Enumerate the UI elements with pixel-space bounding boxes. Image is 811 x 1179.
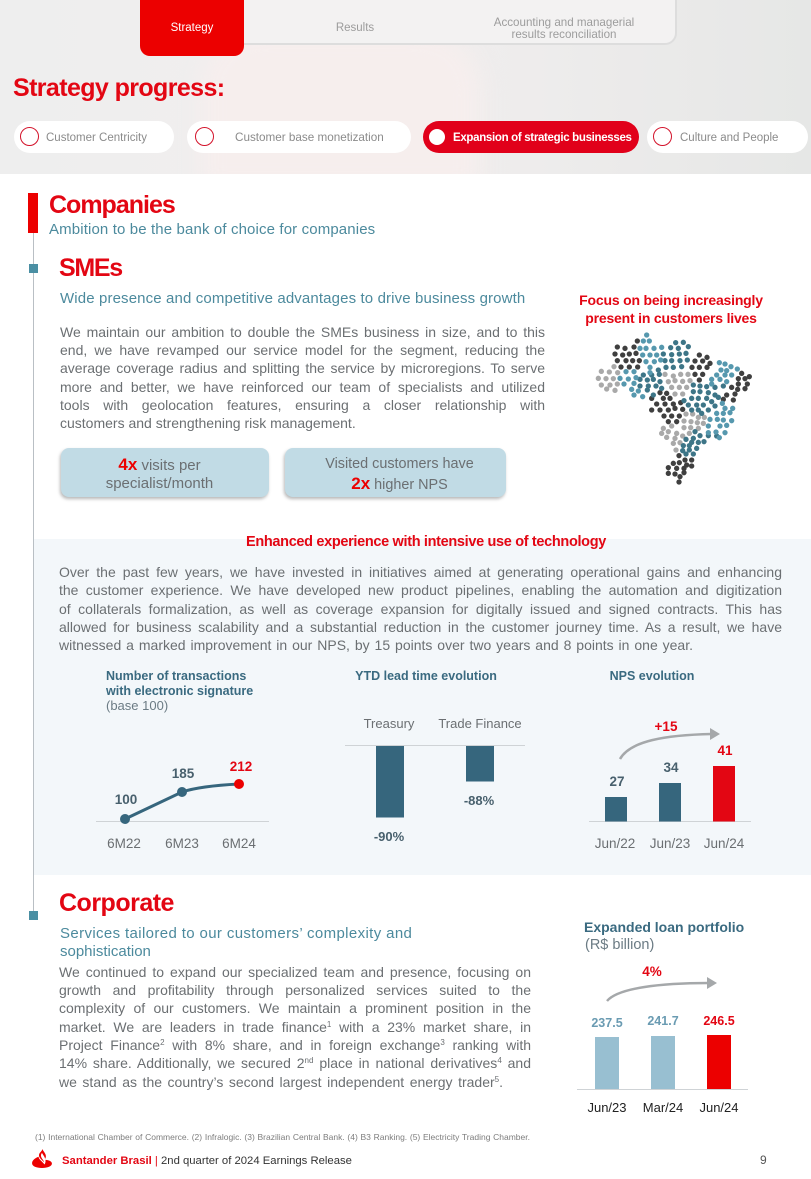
chart: expanded loan portfolio: (R$ billion) [585,937,654,953]
chart: NPS evolution: 34 [663,760,679,775]
active tab: Strategy [140,0,244,56]
pill: Culture and People [647,121,808,153]
text block: SMEs body: We maintain our ambition to double the SMEs business in size, and to this [60,324,545,340]
chart: electronic signature line: Number of transactions [106,669,246,683]
chart: NPS evolution: +15 [655,719,678,734]
chart: electronic signature line: with electronic signature [105,684,253,698]
text block: Corporate body: Project Finance2 with 8% share, and in foreign exchange3 ranking with [59,1037,531,1053]
chart: expanded loan portfolio: 237.5 [591,1016,623,1030]
chart: electronic signature line: (base 100) [106,698,168,713]
text block: technology body: witnessed a marked improvement in our NPS, by 15 points over two years and 8 points in one year. [59,637,693,653]
tab: Accounting and managerial results reconciliation: results reconciliation [511,28,617,41]
text block: SMEs body: tools with geolocation features, ensuring a closer relationship with [60,397,545,413]
footnote: (1) International Chamber of Commerce. (2) Infralogic. (3) Brazilian Central Bank. (4) B3 Ranking. (5) Electricity Trading Chamber. [35,1132,530,1142]
text block: Corporate body: 14% share. Additionally, we secured 2nd place in national derivatives4 and [59,1055,531,1071]
footer [32,1149,767,1168]
tab: Results: Results [336,22,374,34]
chart: YTD lead time: Trade Finance [438,716,522,731]
chart: expanded loan portfolio: 4% [642,964,662,979]
subheading: SMEs: Wide presence and competitive advantages to drive business growth [60,290,525,307]
chart: electronic signature line: 6M22 [107,836,141,851]
heading: Corporate: Corporate [59,889,174,917]
text block: technology body: of collaterals formalization, as well as coverage expansion for digitally issued and signed contracts. This has [59,601,782,617]
inactive tab bar [140,0,677,45]
subheading: Companies ambition: Ambition to be the bank of choice for companies [49,221,375,238]
chart: electronic signature line: 212 [230,759,252,774]
chart: NPS evolution: 27 [609,774,625,789]
text block: technology body: Over the past few years, we have invested in initiatives aimed at generating operational gains and enhancing [59,564,782,580]
subheading: Corporate: sophistication [60,943,151,960]
callout: 2x NPS [285,448,506,497]
chart: YTD lead time: -90% [374,829,405,844]
text block: Corporate body: We continued to expand our specialized team and presence, focusing on [59,964,531,980]
text block: SMEs body: average coverage radius and splitting the service by microregions. To serve [60,360,545,376]
heading: Companies: Companies [49,191,175,219]
tab: Accounting and managerial results reconciliation: Accounting and managerial [494,16,634,29]
text block: Corporate body: complexity of our customers. We maintain a prominent position in the [59,1000,531,1016]
chart: electronic signature line: 6M23 [165,836,199,851]
chart: expanded loan portfolio: Expanded loan portfolio [584,919,744,935]
page number: 9 [760,1153,767,1167]
chart: YTD lead time [345,669,525,844]
text block: technology body: allowed for business scalability and a substantial reduction in the customer journey time. As a result, we have [59,619,782,635]
chart: NPS evolution: 41 [717,743,733,758]
pill: Expansion of strategic businesses (active) [423,121,639,153]
heading: SMEs: SMEs [59,254,122,282]
heading: technology: Enhanced experience with intensive use of technology [246,534,606,550]
callout: 2x NPS: Visited customers have [325,456,474,472]
active tab: Strategy: Strategy [171,22,213,34]
text block: Corporate body: market. We are leaders in trade finance1 with a 23% market share, in [59,1018,531,1034]
callout: 4x visits [61,448,269,497]
heading: map [579,292,763,326]
text block: SMEs body [60,324,545,431]
callout: 4x visits: specialist/month [106,475,213,492]
chart: expanded loan portfolio: Mar/24 [643,1100,683,1115]
Corporate marker [29,911,38,920]
top navigation tabs [140,0,677,56]
chart: NPS evolution: Jun/24 [704,836,745,851]
text block: SMEs body: end, we have revamped our service model for the segment, reducing the [60,342,545,358]
chart: YTD lead time: Treasury [364,716,415,731]
text block: technology body: the customer experience. We have developed new product pipelines, enabling the automation and digitization [59,582,782,598]
pill: Customer Centricity: Customer Centricity [46,132,147,144]
pill: Culture and People: Culture and People [680,132,778,144]
chart: NPS evolution: Jun/22 [595,836,635,851]
panel: technology background [34,539,811,875]
SMEs marker [29,264,38,273]
pill: Customer base monetization [187,121,411,153]
chart: electronic signature line: 185 [172,766,195,781]
text block: Corporate body: we stand as the country’s second largest independent energy trader5. [59,1074,503,1090]
text block: SMEs body: customers and strengthening risk management. [60,415,356,431]
text block: technology body [59,564,782,653]
chart: expanded loan portfolio: Jun/23 [587,1100,627,1115]
chart: expanded loan portfolio: Jun/24 [699,1100,739,1115]
chart: electronic signature line: 6M24 [222,836,256,851]
chart: expanded loan portfolio [577,919,748,1115]
chart: YTD lead time: -88% [464,793,495,808]
pill: Customer base monetization: Customer base monetization [235,131,384,144]
map of Brazil dots [596,332,752,485]
footer text: Santander Brasil | 2nd quarter of 2024 Earnings Release [62,1155,352,1167]
heading: map: present in customers lives [585,310,757,326]
chart: NPS evolution: NPS evolution [610,669,694,683]
tab: Accounting and managerial results reconciliation [494,16,634,41]
callout: 2x NPS: 2x higher NPS [351,474,448,493]
pill: Customer Centricity [14,121,174,153]
chart: expanded loan portfolio: 246.5 [703,1014,735,1028]
icon: Santander flame [32,1149,52,1168]
subheading: Corporate [60,925,412,960]
chart: electronic signature line: 100 [115,792,137,807]
text block: Corporate body [59,964,531,1090]
subheading: Corporate: Services tailored to our customers’ complexity and [60,925,412,942]
text block: Corporate body: growth and profitability through personalized services suited to the [59,982,531,998]
chart: electronic signature line [96,669,269,851]
heading: map: Focus on being increasingly [579,292,763,308]
header background [0,0,811,174]
chart: NPS evolution: Jun/23 [650,836,690,851]
chart: expanded loan portfolio: 241.7 [647,1014,679,1028]
chart: NPS evolution [589,669,751,851]
chart: YTD lead time: YTD lead time evolution [355,669,497,683]
callout: 4x visits: 4x visits per [118,455,201,474]
red section marker [28,193,38,233]
pill: Expansion of strategic businesses (active): Expansion of strategic businesses [453,132,632,144]
timeline line [33,233,34,913]
text block: SMEs body: more and better, we have reinforced our team of specialists and utilized [60,379,545,395]
heading: Strategy progress: Strategy progress: [13,74,224,102]
